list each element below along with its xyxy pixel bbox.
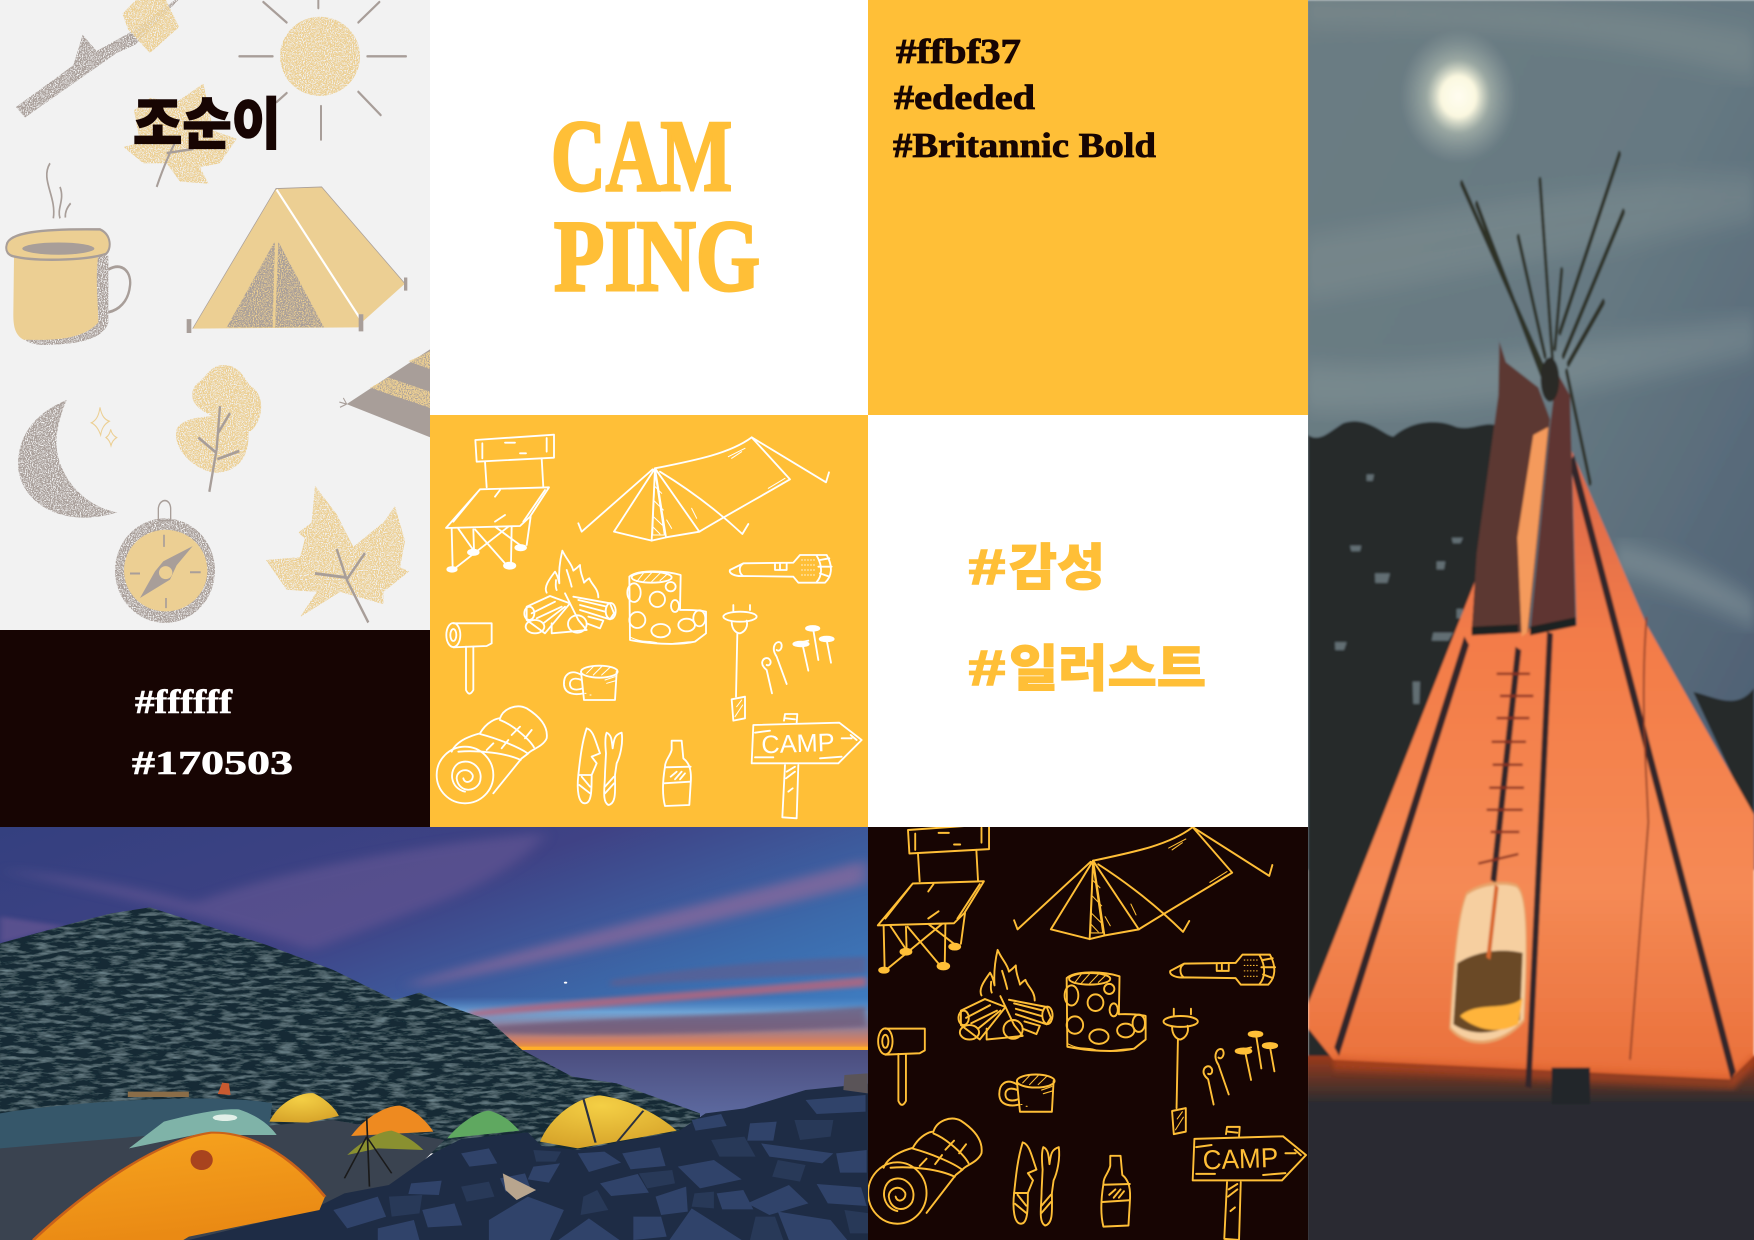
icon: leaf behind name [123,84,237,187]
icon: crescent moon [18,400,117,518]
panel: CAMPING title [430,0,868,415]
name title: 조순이 [133,93,281,156]
sky with moon [1307,0,1754,870]
hashtag: 감성 [969,539,1105,596]
icon: tent [187,187,407,333]
panel: palette and font tags on yellow [868,0,1308,415]
title: CAM: CAM [551,100,732,213]
teepee body [1308,451,1754,1087]
icon: roasting stick [16,0,178,118]
icon: marshmallow [124,0,177,51]
smoke flaps [1472,342,1576,637]
icon: sparkles [91,407,117,446]
sign label: CAMP: CAMP [1202,1142,1279,1176]
icon: compass [115,501,215,623]
hashtag: 일러스트: 일러스트 [1009,641,1206,697]
ground slab [0,1083,444,1240]
stove bucket [1552,1068,1590,1104]
hashtag: 감성: # [969,539,1005,596]
sky [0,827,871,1060]
poles [1462,154,1623,482]
sea of clouds [517,1050,871,1117]
tag: #ffffff: #ffffff [135,684,233,721]
tents [129,1093,677,1187]
door with firelight [1450,883,1526,1042]
tag: #170503: #170503 [132,745,293,782]
hashtag: 감성: 감성 [1009,540,1105,596]
large orange tent [33,1133,325,1240]
panel: hashtags [868,415,1308,827]
photo: mountain camp at dusk [0,827,871,1240]
icon: maple leaf [266,486,409,622]
ground [1307,1056,1754,1240]
icon: enamel mug [6,163,130,345]
photo: glowing teepee under moonlit sky [1307,0,1754,1240]
icon: round leaf [176,365,261,492]
panel: yellow doodles on dark [868,824,1308,1240]
tree line [1308,421,1754,1107]
tag: #Britannic Bold: #Britannic Bold [893,126,1157,165]
panel: grey illustration sheet [0,0,431,630]
hashtag: 일러스트: # [969,640,1005,697]
title: PING: PING [554,200,760,313]
icon: partial striped tent [339,349,431,438]
icon: sun [239,0,406,140]
panel: white doodles on yellow [430,415,868,827]
sign label: CAMP: CAMP [761,729,835,759]
tag: #ffbf37: #ffbf37 [896,32,1021,71]
tag: #ededed: #ededed [894,78,1036,117]
panel: dark swatch with color codes [0,630,430,828]
mountain [0,907,700,1153]
foreground rocks [189,1073,871,1240]
